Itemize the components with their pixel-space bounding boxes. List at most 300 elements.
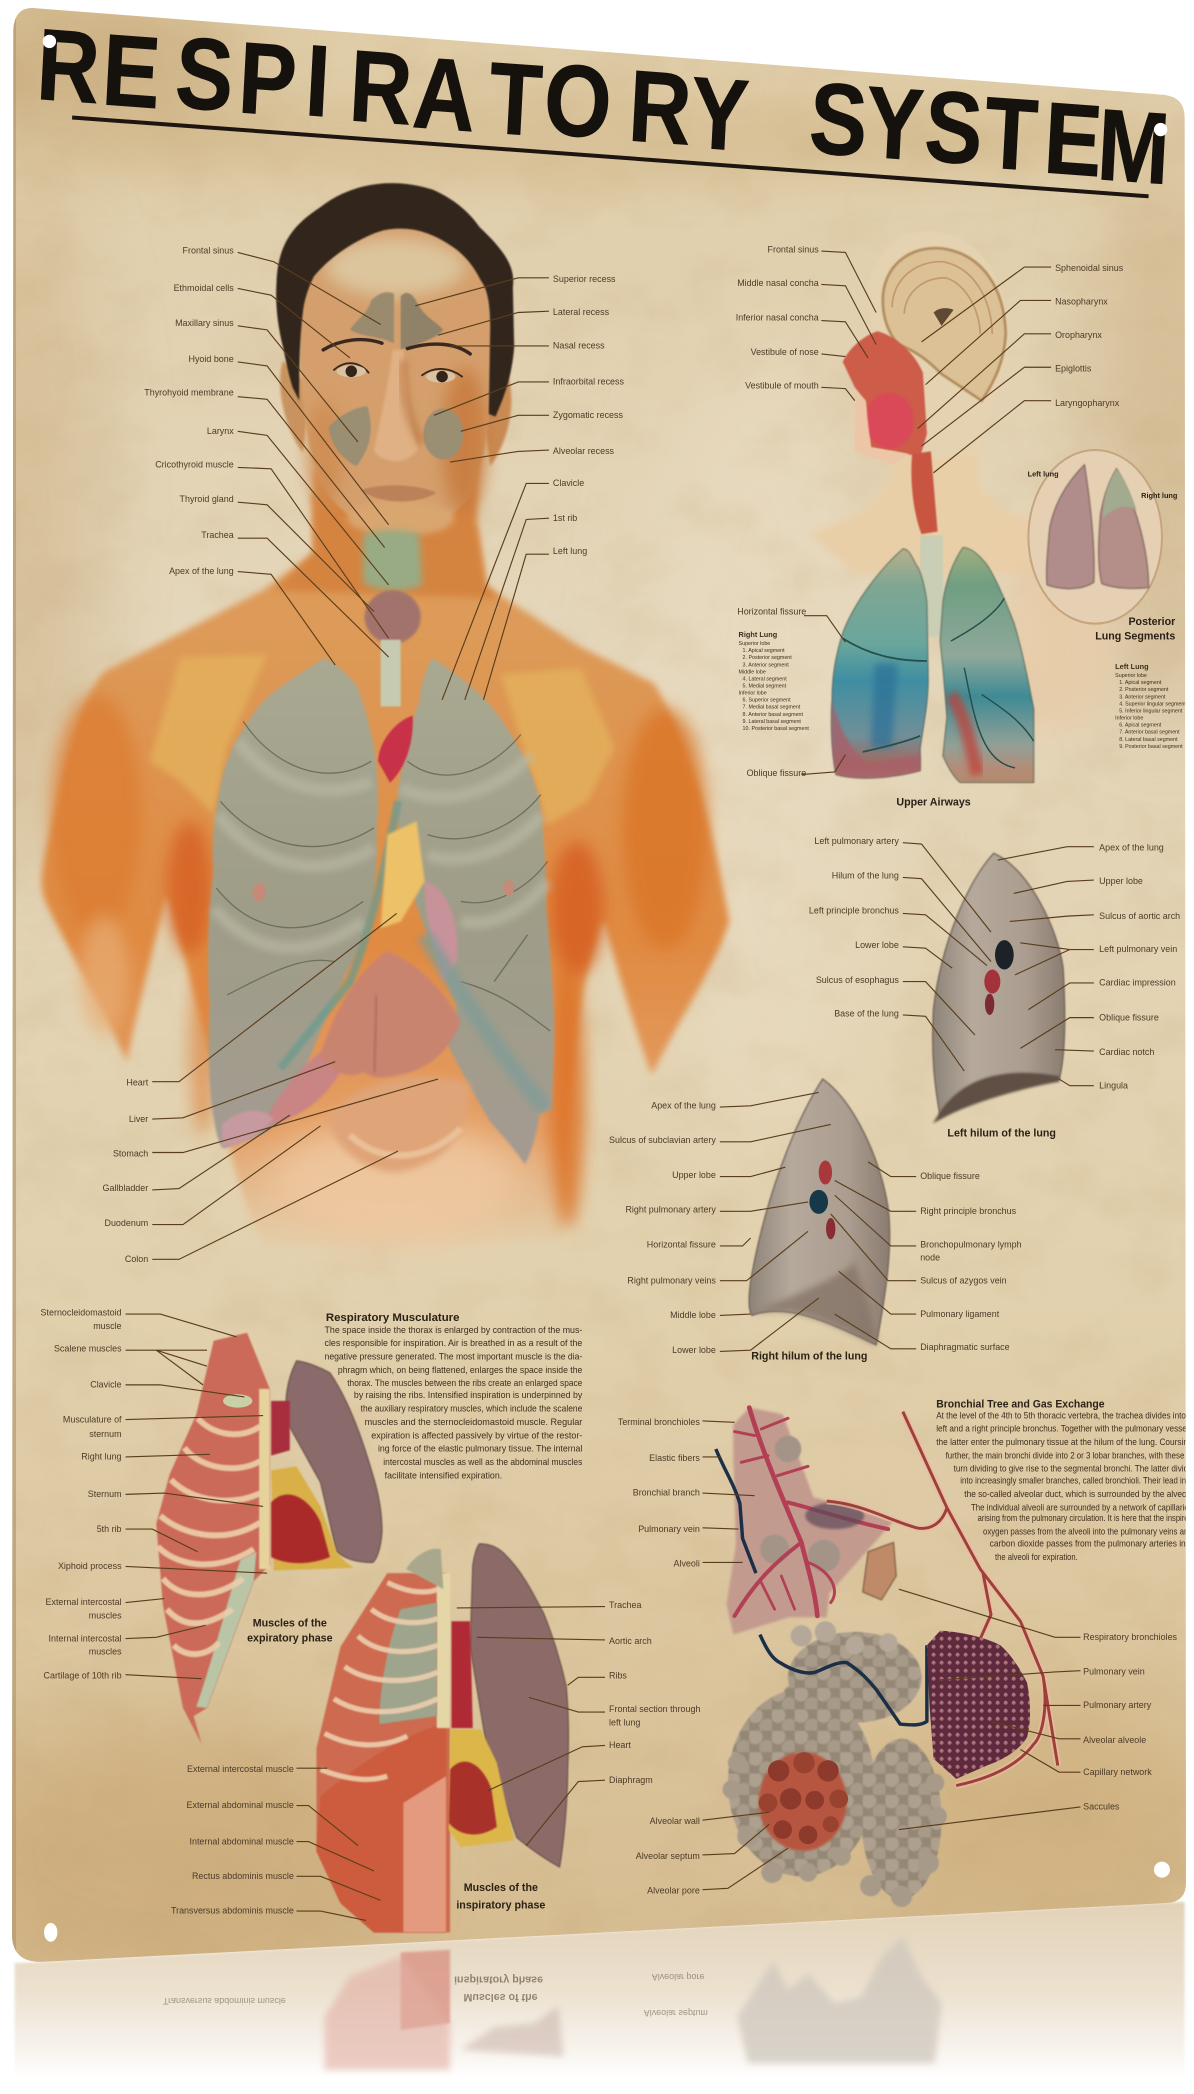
right hilum labels: Upper lobe	[672, 1170, 716, 1180]
right lung segment list: Inferior lobe	[739, 691, 767, 697]
left hilum labels: Left principle bronchus	[809, 905, 899, 915]
left cheek shade	[307, 401, 342, 507]
left hilum labels: Base of the lung	[834, 1008, 899, 1018]
dark rib lines	[407, 735, 550, 1031]
left hilum labels: Sulcus of aortic arch	[1099, 911, 1180, 921]
head labels: Laryngopharynx	[1055, 398, 1120, 408]
body text: The space inside the thorax is enlarged by contraction of the mus-	[325, 1325, 582, 1335]
mediastinum	[381, 821, 425, 928]
right hilum labels: Sulcus of azygos vein	[920, 1275, 1007, 1285]
labels: Alveolar alveole	[1083, 1735, 1146, 1745]
aorta	[451, 1621, 473, 1728]
labels: Right lung	[81, 1452, 122, 1462]
right hilum labels: Diaphragmatic surface	[920, 1342, 1010, 1352]
labels: muscle	[93, 1321, 122, 1331]
labels: muscles	[89, 1647, 122, 1657]
right hilum labels: Right pulmonary artery	[625, 1205, 716, 1215]
panel: bronchial tree and gas exchange	[618, 1399, 1194, 1907]
labels: Internal intercostal	[49, 1633, 122, 1643]
face and chest labels: 1st rib	[553, 513, 577, 523]
face and chest labels: Trachea	[201, 530, 234, 540]
dark blue lobe	[871, 664, 898, 748]
head labels: Sphenoidal sinus	[1055, 263, 1124, 273]
reflected labels: Alveolar pore	[652, 1972, 704, 1982]
labels: Ribs	[609, 1671, 627, 1681]
labels: Internal abdominal muscle	[189, 1836, 294, 1846]
labels: Bronchial branch	[633, 1488, 700, 1498]
left hilum labels: Upper lobe	[1099, 876, 1143, 886]
labels: Sternum	[88, 1489, 122, 1499]
labels: sternum	[89, 1429, 122, 1439]
right hilum labels: Right hilum of the lung	[751, 1350, 867, 1362]
labels: Xiphoid process	[58, 1561, 122, 1571]
left hilum labels	[809, 836, 1180, 1139]
pink tip	[222, 1111, 274, 1146]
lung	[470, 1544, 568, 1867]
reflected alveoli	[737, 1936, 942, 2063]
cartilage	[379, 1603, 437, 1724]
eye iris right	[436, 371, 448, 382]
fissure	[951, 598, 1034, 768]
chin shade	[345, 513, 456, 536]
right hilum labels	[609, 1092, 1022, 1362]
hilum vessels	[984, 940, 1014, 1015]
body text: phragm which, on being flattened, enlarges the space inside the	[338, 1365, 582, 1375]
ears	[280, 361, 310, 453]
eye whites right	[426, 371, 455, 383]
pale sternum strip	[259, 1389, 270, 1569]
sectioned alveoli	[759, 1752, 848, 1851]
labels: Musculature of	[63, 1414, 122, 1424]
frontal sinus right	[401, 293, 443, 350]
head labels: Epiglottis	[1055, 363, 1092, 373]
pulmonary artery halo	[827, 1412, 1058, 1786]
labels: Alveolar septum	[636, 1851, 700, 1861]
bronchial tree	[727, 1408, 896, 1635]
hair	[276, 183, 514, 417]
face and chest labels: Nasal recess	[553, 341, 605, 351]
frontal sinus left	[350, 292, 394, 343]
face and chest labels: Hyoid bone	[189, 354, 234, 364]
face and chest labels: Colon	[125, 1254, 148, 1264]
bronchial bulbs	[760, 1436, 840, 1572]
reflected captions	[454, 1973, 543, 2003]
face and chest labels: Frontal sinus	[183, 246, 234, 256]
reflected labels: Transversus abdominis muscle	[163, 1996, 286, 2006]
right lung segment list: 6. Superior segment	[743, 698, 791, 704]
neck	[274, 461, 501, 598]
reflected captions: inspiratory phase	[454, 1973, 543, 1985]
panel: respiratory musculature text	[325, 1312, 585, 1480]
panel: left hilum of the lung	[809, 836, 1180, 1139]
eye irises	[346, 366, 357, 377]
right hilum labels: Right pulmonary veins	[627, 1275, 716, 1285]
face and chest labels: Superior recess	[553, 274, 616, 284]
liver	[321, 951, 461, 1078]
head labels	[736, 244, 1177, 808]
labels: Saccules	[1083, 1802, 1120, 1812]
head labels: Vestibule of nose	[751, 347, 819, 357]
right lung	[397, 658, 554, 1165]
eye whites left	[337, 365, 366, 377]
body text: by raising the ribs. Intensified inspiration is underpinned by	[354, 1390, 583, 1400]
larynx	[363, 530, 422, 591]
pink mediastinal lobe	[425, 881, 457, 982]
labels: Capillary network	[1083, 1767, 1152, 1777]
hole bottom right	[1154, 1862, 1170, 1878]
left lung segment list: 3. Anterior segment	[1119, 694, 1166, 700]
head labels: Left lung	[1028, 470, 1059, 479]
body text: negative pressure generated. The most important muscle is the dia-	[325, 1351, 582, 1361]
left lung segment list: Inferior lobe	[1115, 716, 1143, 722]
nose side shade	[403, 361, 422, 443]
head labels: Right lung	[1141, 491, 1177, 500]
right lung segment list: 5. Medial segment	[743, 683, 787, 689]
labels: Scalene muscles	[54, 1343, 122, 1353]
lower shadow	[752, 1262, 876, 1345]
labels	[41, 1307, 333, 1681]
rectus strip	[403, 1776, 446, 1932]
right lung segment list: 8. Anterior basal segment	[743, 712, 804, 718]
great vessels	[271, 1401, 290, 1456]
ribcage	[156, 1333, 270, 1744]
inset left lung	[1047, 465, 1094, 589]
left lung segment list: 8. Lateral basal segment	[1119, 737, 1178, 743]
head labels: Inferior nasal concha	[736, 313, 819, 323]
right lung segment list: 2. Posterior segment	[743, 655, 792, 661]
right lung segment list: 10. Posterior basal segment	[743, 726, 809, 732]
head labels: Lung Segments	[1095, 631, 1175, 643]
left hilum labels: Lower lobe	[855, 940, 899, 950]
yellow pericardial fat	[271, 1466, 354, 1570]
nasal cavity	[843, 331, 927, 457]
face and chest labels: Liver	[129, 1114, 148, 1124]
labels: Heart	[609, 1740, 631, 1750]
head labels: Posterior	[1128, 616, 1175, 628]
pulmonary vein	[716, 1449, 927, 1725]
brain rings	[892, 262, 992, 334]
left lung segment list: Superior lobe	[1115, 673, 1147, 679]
body text: the alveoli for expiration.	[995, 1552, 1078, 1562]
face and chest labels	[103, 246, 624, 1264]
labels: Elastic fibers	[649, 1453, 700, 1463]
pale strip	[437, 1573, 450, 1728]
labels: Pulmonary vein	[1083, 1667, 1145, 1677]
clavicle	[223, 1394, 252, 1408]
face and chest labels: Left lung	[553, 546, 587, 556]
right lung segment list: 9. Lateral basal segment	[743, 719, 801, 725]
lung spots	[252, 883, 266, 901]
face and chest labels: Lateral recess	[553, 307, 610, 317]
inset right lung top	[1103, 469, 1137, 518]
labels: Pulmonary artery	[1083, 1700, 1152, 1710]
left hilum labels: Cardiac notch	[1099, 1047, 1154, 1057]
body text: facilitate intensified expiration.	[385, 1470, 502, 1480]
left lung segment list: 7. Anterior basal segment	[1119, 730, 1180, 736]
right hilum labels: Horizontal fissure	[647, 1239, 716, 1249]
body text: thorax. The muscles between the ribs create an enlarged space	[347, 1378, 582, 1388]
labels: Aortic arch	[609, 1636, 652, 1646]
face and chest labels: Ethmoidal cells	[174, 283, 234, 293]
right hilum lung	[749, 1079, 890, 1345]
flank shading	[51, 694, 708, 1229]
cranium	[868, 231, 1008, 461]
left hilum labels: Left hilum of the lung	[947, 1127, 1056, 1139]
labels: inspiratory phase	[456, 1899, 545, 1911]
reflected lung	[461, 2006, 564, 2057]
left hilum labels: Hilum of the lung	[832, 871, 899, 881]
body text: expiration is affected passively by virtue of the restor-	[371, 1430, 582, 1440]
shoulder clavicle area	[150, 654, 267, 815]
face and chest labels: Infraorbital recess	[553, 377, 624, 387]
left lung segment list: 9. Posterior basal segment	[1119, 744, 1183, 750]
abdominal muscles	[317, 1723, 446, 1932]
labels: Trachea	[609, 1600, 642, 1610]
red margin	[832, 701, 920, 778]
face and chest labels: Cricothyroid muscle	[155, 459, 234, 469]
left lung segment list: 5. Inferior lingular segment	[1119, 708, 1183, 714]
reflected labels: Alveolar septum	[644, 2008, 708, 2018]
branches	[735, 1408, 888, 1616]
right lung segment list: 1. Apical segment	[743, 648, 785, 654]
left lung segment list: 6. Apical segment	[1119, 723, 1162, 729]
labels: Sternocleidomastoid	[41, 1307, 122, 1317]
lung	[286, 1361, 382, 1562]
face and chest labels: Thyroid gland	[180, 494, 234, 504]
brows and eyes	[323, 340, 470, 377]
left hilum lung	[933, 853, 1065, 1116]
body text: muscles and the sternocleidomastoid muscle. Regular	[365, 1417, 582, 1427]
head labels: Upper Airways	[896, 796, 971, 808]
labels: Frontal section through	[609, 1704, 700, 1714]
colon crescent	[350, 1128, 461, 1155]
panel: muscles of the inspiratory phase	[171, 1544, 700, 1932]
labels: External intercostal	[46, 1597, 122, 1607]
stomach and colon	[327, 1076, 470, 1173]
face and chest labels: Larynx	[207, 426, 234, 436]
labels: External abdominal muscle	[187, 1800, 294, 1810]
right lung segment list: 3. Anterior segment	[743, 662, 789, 668]
labels: Transversus abdominis muscle	[171, 1906, 294, 1916]
face and chest labels: Gallbladder	[103, 1183, 148, 1193]
labels: Terminal bronchioles	[618, 1417, 700, 1427]
nose	[374, 350, 418, 461]
right hilum labels: Lower lobe	[672, 1345, 716, 1355]
left hilum labels: Sulcus of esophagus	[816, 975, 899, 985]
left lung segment list: 1. Apical segment	[1119, 680, 1162, 686]
body text: intercostal muscles as well as the abdominal muscles	[383, 1457, 583, 1467]
labels: Respiratory bronchioles	[1083, 1632, 1178, 1642]
head labels: Horizontal fissure	[737, 606, 806, 616]
left hilum labels: Lingula	[1099, 1080, 1128, 1090]
top cartilage	[406, 1549, 443, 1589]
face and chest labels: Maxillary sinus	[175, 318, 234, 328]
right hilum labels: Bronchopulmonary lymph	[920, 1239, 1022, 1249]
hole top right	[1154, 123, 1167, 136]
posterior lung segments inset	[1028, 450, 1162, 624]
shoulder clavicle area right	[501, 668, 614, 825]
left hilum labels: Apex of the lung	[1099, 843, 1164, 853]
labels: Alveolar wall	[650, 1816, 700, 1826]
panel: right hilum of the lung	[609, 1079, 1022, 1362]
labels: 5th rib	[97, 1524, 122, 1534]
pale rib bands	[214, 741, 374, 948]
left lung segment list: 2. Posterior segment	[1119, 687, 1169, 693]
reflected muscle figure	[401, 1950, 450, 2030]
right hilum labels: Right principle bronchus	[920, 1206, 1017, 1216]
left lung	[208, 658, 378, 1148]
teal band right	[425, 935, 545, 1108]
labels	[618, 1417, 1178, 1896]
hilum vessels	[809, 1161, 835, 1239]
right lung segment list: Superior lobe	[739, 641, 770, 647]
pharynx tube	[911, 451, 938, 534]
panel: male torso anatomy	[42, 183, 729, 1264]
left hilum labels: Oblique fissure	[1099, 1012, 1159, 1022]
chin	[855, 394, 908, 465]
labels: Pulmonary vein	[638, 1524, 700, 1534]
hole top left	[43, 35, 56, 48]
fissure	[843, 638, 927, 752]
face and chest labels: Clavicle	[553, 478, 584, 488]
pale lower abdomen	[267, 1122, 521, 1242]
brain	[883, 248, 1006, 401]
labels: Muscles of the	[464, 1882, 538, 1894]
body text: ing force of the elastic pulmonary tissue. The internal	[378, 1444, 582, 1454]
title rule	[72, 118, 1149, 196]
heart vessels	[378, 716, 413, 783]
head labels: Nasopharynx	[1055, 296, 1108, 306]
maxillary sinus right	[423, 409, 463, 459]
left lung segment list: 4. Superior lingular segment	[1119, 701, 1186, 707]
left lung segment list: Left Lung	[1115, 662, 1149, 671]
lung spot	[504, 880, 514, 896]
red vessels	[951, 694, 978, 775]
dark rib lines	[216, 721, 374, 995]
face	[299, 227, 492, 532]
left hilum labels: Cardiac impression	[1099, 978, 1176, 988]
labels: expiratory phase	[247, 1632, 333, 1644]
right hilum labels: Oblique fissure	[920, 1171, 980, 1181]
labels: Alveoli	[674, 1558, 700, 1568]
right cheek shade	[442, 367, 487, 514]
labels: Rectus abdominis muscle	[192, 1871, 294, 1881]
body skin	[42, 493, 729, 1249]
forehead highlight	[326, 238, 465, 296]
labels: muscles	[89, 1611, 122, 1621]
body text: cles responsible for inspiration. Air is breathed in as a result of the	[325, 1338, 582, 1348]
cartilage	[196, 1552, 256, 1708]
reflected muscle figure lower	[325, 1956, 450, 2070]
face and chest labels: Duodenum	[105, 1218, 148, 1228]
text block: bronchial tree	[936, 1399, 1194, 1562]
muscle wall	[317, 1573, 450, 1932]
peach chest glow	[1002, 548, 1109, 735]
panel: muscles of the expiratory phase	[41, 1307, 382, 1744]
labels: Cartilage of 10th rib	[44, 1671, 122, 1681]
face and chest labels: Zygomatic recess	[553, 410, 623, 420]
brain ventricle	[934, 308, 954, 326]
head labels: Oropharynx	[1055, 330, 1102, 340]
teal bronchial vessel	[280, 801, 398, 1068]
left lung lower pink lobe	[260, 1042, 350, 1128]
face and chest labels: Stomach	[113, 1149, 148, 1159]
neck and shoulders silhouette	[809, 387, 1068, 574]
right lung segment list: 4. Lateral segment	[743, 676, 787, 682]
capillary network	[927, 1631, 1030, 1779]
heading: Bronchial Tree and Gas Exchange	[936, 1399, 1105, 1411]
pale rib bands	[401, 755, 548, 923]
right lung segment list: 7. Medial basal segment	[743, 705, 801, 711]
reflected captions: Muscles of the	[463, 1991, 538, 2003]
panel: upper airways	[736, 231, 1186, 808]
heart	[271, 1495, 330, 1563]
mouth	[361, 485, 437, 501]
right hilum labels: Apex of the lung	[651, 1100, 716, 1110]
face and chest labels: Heart	[126, 1078, 149, 1088]
rib bands	[321, 1583, 438, 1779]
labels: Muscles of the	[253, 1618, 327, 1630]
heart	[449, 1762, 497, 1834]
face and chest labels: Thyrohyoid membrane	[144, 387, 234, 397]
head labels: Oblique fissure	[747, 768, 806, 778]
labels: External intercostal muscle	[187, 1764, 294, 1774]
labels	[171, 1600, 700, 1920]
hole bottom left	[44, 1923, 57, 1942]
right lung segment list: Middle lobe	[739, 669, 766, 675]
base shadow	[940, 1075, 1059, 1116]
right lung of pair	[940, 548, 1034, 783]
bronchiole end	[863, 1542, 896, 1600]
maxillary sinus left	[329, 406, 371, 466]
reflected labels	[163, 1972, 708, 2018]
thyroid	[365, 590, 421, 644]
trachea	[381, 640, 401, 706]
body text: the auxiliary respiratory muscles, which include the scalene	[361, 1404, 582, 1414]
right hilum labels: Pulmonary ligament	[920, 1309, 1000, 1319]
head	[276, 183, 514, 536]
left hilum labels: Left pulmonary vein	[1099, 944, 1177, 954]
head labels: Vestibule of mouth	[745, 381, 819, 391]
right hilum labels: Middle lobe	[670, 1310, 716, 1320]
labels: Alveolar pore	[647, 1886, 700, 1896]
face and chest labels: Apex of the lung	[169, 566, 234, 576]
right ear	[486, 376, 513, 466]
right lung segment list: Right Lung	[739, 630, 777, 639]
left hilum labels: Left pulmonary artery	[814, 836, 899, 846]
reflection of the poster on the white surface	[15, 1902, 1185, 2094]
rib bands	[158, 1418, 260, 1654]
face and chest labels: Alveolar recess	[553, 446, 615, 456]
title: RESPIRATORY SYSTEM	[34, 7, 1172, 206]
inset right lung	[1099, 469, 1149, 588]
dark bronchial knot	[805, 1502, 864, 1529]
head labels: Middle nasal concha	[737, 278, 819, 288]
heading: Respiratory Musculature	[326, 1312, 459, 1324]
left lung of pair	[832, 549, 928, 778]
trachea	[920, 536, 943, 637]
labels: Diaphragm	[609, 1775, 653, 1785]
alveoli clusters	[723, 1621, 947, 1907]
pulmonary artery core	[827, 1412, 1058, 1786]
labels: left lung	[609, 1717, 640, 1727]
head labels: Frontal sinus	[768, 244, 819, 254]
right hilum labels: node	[920, 1253, 940, 1263]
mouth cavity	[865, 393, 914, 449]
liver cleavage	[374, 995, 377, 1072]
right hilum labels: Sulcus of subclavian artery	[609, 1135, 716, 1145]
labels: Clavicle	[90, 1380, 122, 1390]
